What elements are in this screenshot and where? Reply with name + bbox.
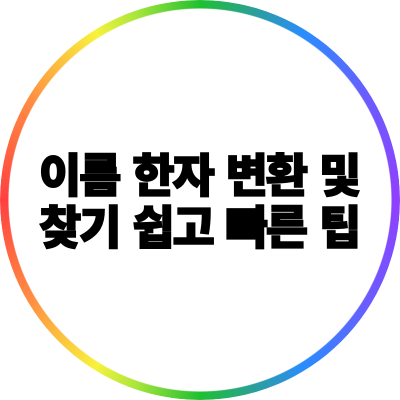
title line 2: 찾기 쉽고 빠른 팁	[39, 202, 359, 254]
title line 1: 이름 한자 변환 및	[39, 150, 359, 202]
